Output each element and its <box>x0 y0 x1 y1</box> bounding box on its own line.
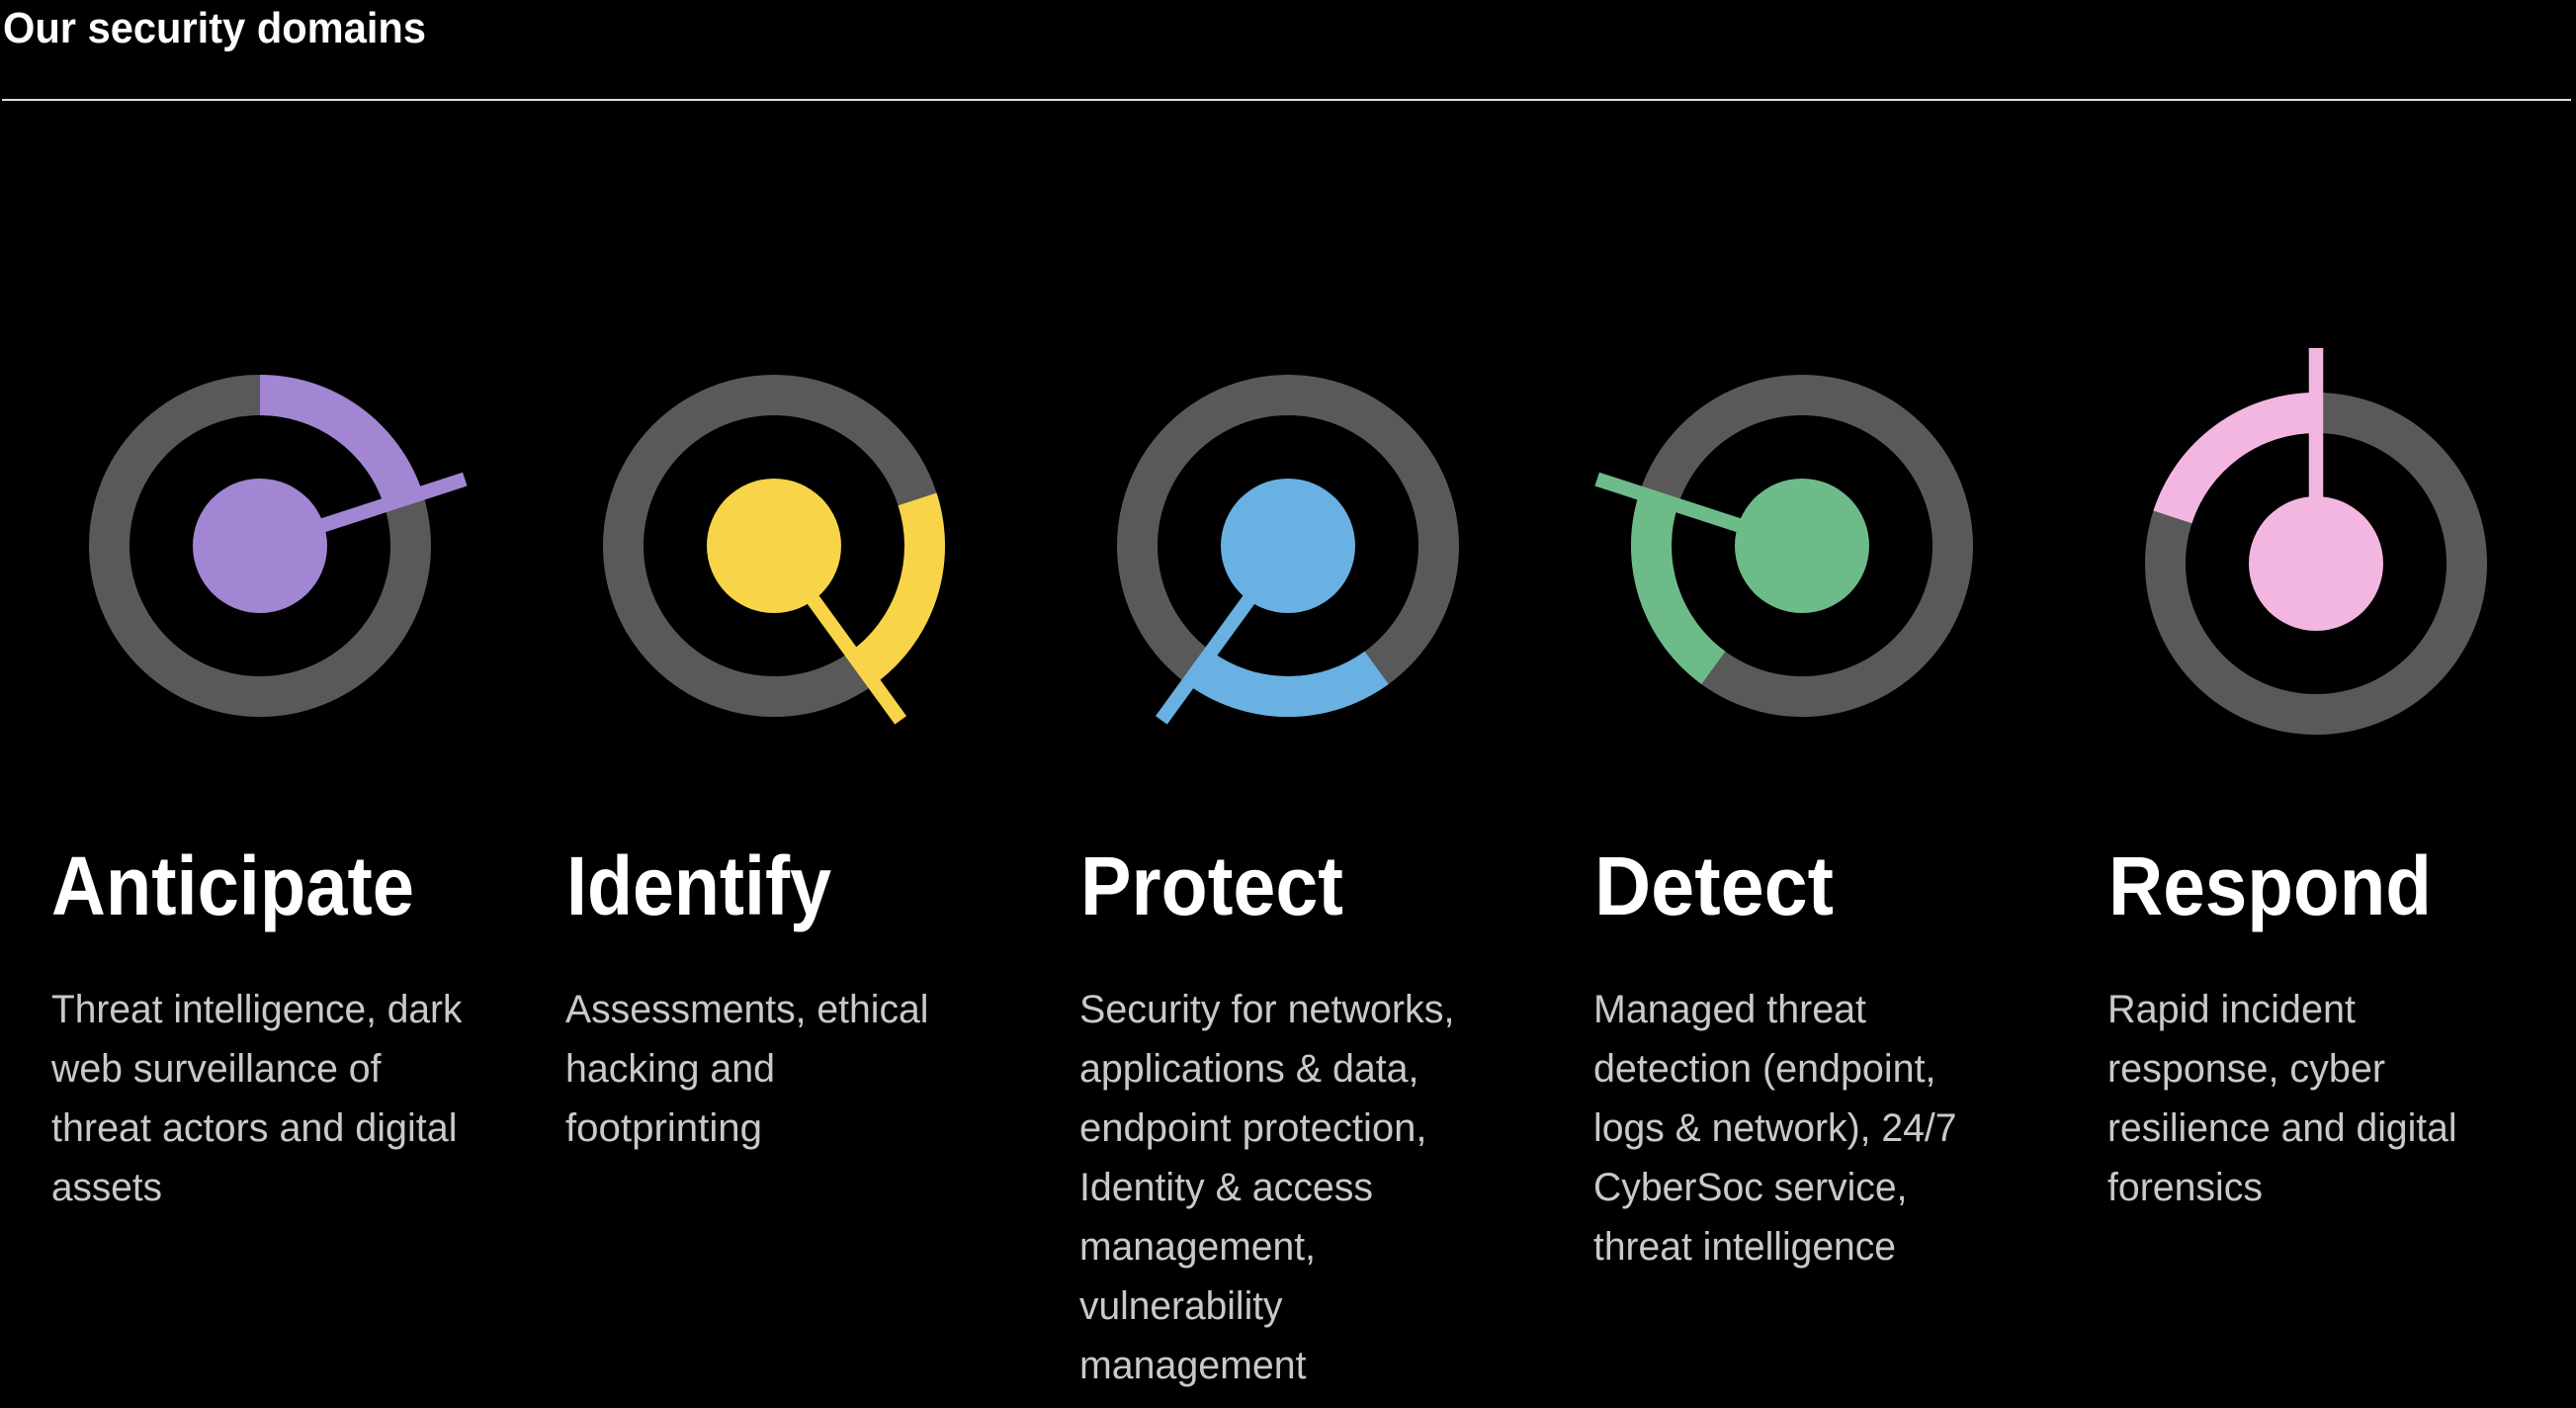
icon: Respond target dial <box>2165 348 2467 714</box>
heading: Detect: Detect <box>1594 839 1834 932</box>
text: Anticipate description: threat actors and digital <box>51 1106 457 1150</box>
panel: Respond <box>2107 348 2467 1209</box>
text: Respond description <box>2107 988 2457 1209</box>
title: Our security domains <box>3 4 426 52</box>
text: Respond description: forensics <box>2107 1166 2263 1209</box>
text: Detect description: threat intelligence <box>1593 1225 1896 1269</box>
panel: Anticipate <box>50 396 465 1209</box>
text: Protect description: Security for networks, <box>1079 988 1455 1031</box>
text: Protect description <box>1079 988 1455 1387</box>
text: Anticipate description: Threat intelligence, dark <box>51 988 463 1031</box>
text: Detect description: detection (endpoint, <box>1593 1047 1935 1091</box>
text: Protect description: management, <box>1079 1225 1316 1269</box>
text: Anticipate description: assets <box>51 1166 162 1209</box>
text: Respond description: response, cyber <box>2107 1047 2385 1091</box>
text: Protect description: Identity & access <box>1079 1166 1373 1209</box>
text: Anticipate description <box>50 988 463 1209</box>
heading: Identify: Identify <box>566 839 831 932</box>
text: Protect description: vulnerability <box>1079 1284 1283 1328</box>
panel: Detect <box>1593 396 1957 1269</box>
panel: Protect <box>1079 396 1455 1387</box>
heading: Respond: Respond <box>2108 839 2432 932</box>
text: Protect description: endpoint protection, <box>1079 1106 1427 1150</box>
text: Identify description <box>565 988 929 1150</box>
text: Detect description: CyberSoc service, <box>1593 1166 1908 1209</box>
icon: Anticipate target dial <box>109 396 465 696</box>
panel: Identify <box>565 396 929 1150</box>
text: Protect description: management <box>1079 1344 1307 1387</box>
text: Identify description: Assessments, ethical <box>565 988 929 1031</box>
text: Respond description: Rapid incident <box>2107 988 2356 1031</box>
heading: Anticipate: Anticipate <box>51 839 414 932</box>
icon: Identify target dial <box>623 396 925 720</box>
text: Respond description: resilience and digital <box>2107 1106 2457 1150</box>
text: Identify description: footprinting <box>565 1106 762 1150</box>
text: Anticipate description: web surveillance of <box>50 1047 382 1091</box>
text: Detect description: Managed threat <box>1593 988 1866 1031</box>
text: Detect description: logs & network), 24/7 <box>1593 1106 1957 1150</box>
text: Detect description <box>1593 988 1957 1269</box>
heading: Protect: Protect <box>1080 839 1343 932</box>
text: Protect description: applications & data, <box>1079 1047 1419 1091</box>
text: Identify description: hacking and <box>565 1047 775 1091</box>
icon: Detect target dial <box>1597 396 1953 696</box>
icon: Protect target dial <box>1137 396 1439 720</box>
